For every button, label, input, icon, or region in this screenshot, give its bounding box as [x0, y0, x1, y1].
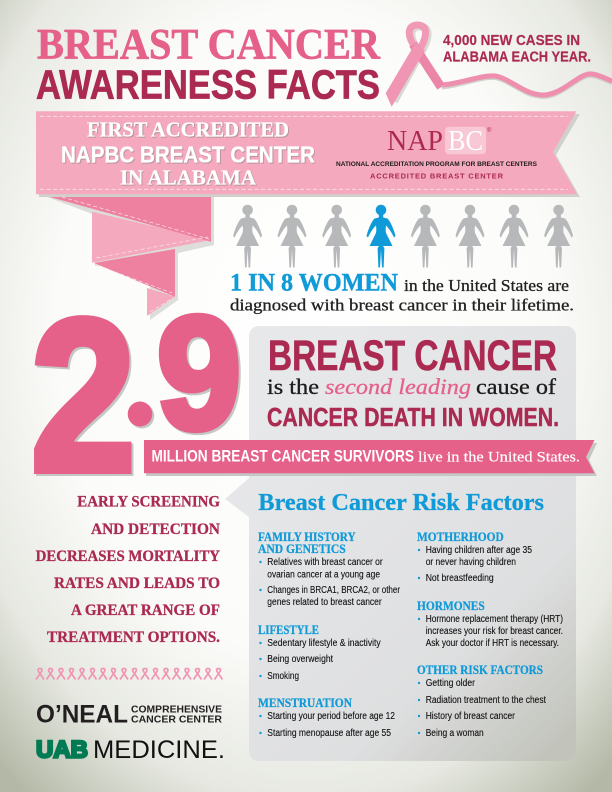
- risk group: family history: Changes in BRCA1, BRCA2, or other: [267, 585, 401, 596]
- logo: UAB Medicine: UAB: [36, 736, 88, 764]
- banner heading: IN ALABAMA: [120, 165, 257, 189]
- risk group: hormones: HORMONES: [417, 599, 485, 613]
- text block: early screening: TREATMENT OPTIONS.: [47, 629, 220, 646]
- 1 in 8 statement: 1 IN 8 WOMEN: [230, 270, 398, 297]
- second leading cause statement: is the: [267, 374, 319, 399]
- NAPBC logo: BC: [448, 125, 483, 157]
- 1 in 8 statement: [230, 270, 574, 315]
- 1 in 8 statement: in the United States are: [404, 276, 569, 295]
- heading: risk factors: Breast Cancer Risk Factors: [258, 490, 544, 516]
- icon row: small ribbons: [36, 668, 222, 680]
- risk group: family history: ovarian cancer at a young age: [267, 569, 380, 580]
- big number 2.9: [31, 275, 241, 516]
- risk group: hormones: [417, 599, 563, 649]
- NAPBC logo: NAP: [387, 125, 443, 157]
- logo: UAB Medicine: MEDICINE.: [93, 736, 225, 764]
- risk group: motherhood: Having children after age 35: [426, 545, 532, 556]
- text block: early screening: DECREASES MORTALITY: [36, 548, 220, 565]
- risk group: other risk factors: Getting older: [426, 678, 476, 689]
- logo: O'Neal: O’NEAL: [36, 701, 128, 729]
- banner: survivors: live in the United States.: [418, 450, 580, 466]
- text block: early screening: A GREAT RANGE OF: [71, 602, 220, 619]
- risk group: menstruation: Starting menopause after age 55: [267, 728, 391, 739]
- panel: grey information panel: [225, 326, 576, 761]
- 1 in 8 statement: diagnosed with breast cancer in their lifetime.: [230, 296, 574, 315]
- risk group: other risk factors: History of breast cancer: [426, 711, 516, 722]
- risk group: family history: genes related to breast cancer: [267, 597, 382, 608]
- risk group: family history: AND GENETICS: [258, 542, 346, 556]
- NAPBC logo: ACCREDITED BREAST CENTER: [370, 172, 504, 181]
- second leading cause statement: cause of: [476, 374, 557, 399]
- risk group: family history: Relatives with breast cancer or: [267, 557, 383, 568]
- banner: survivors: MILLION BREAST CANCER SURVIVORS: [152, 448, 414, 466]
- risk group: hormones: increases your risk for breast cancer.: [426, 626, 563, 637]
- panel: accreditation banner: [36, 111, 580, 197]
- risk group: motherhood: Not breastfeeding: [426, 573, 494, 584]
- risk group: menstruation: [258, 696, 395, 739]
- title: AWARENESS FACTS: [36, 62, 380, 108]
- risk group: other risk factors: OTHER RISK FACTORS: [417, 663, 543, 677]
- risk group: lifestyle: Smoking: [267, 671, 299, 682]
- NAPBC logo: NATIONAL ACCREDITATION PROGRAM FOR BREAST CENTERS: [336, 161, 537, 168]
- title: BREAST CANCER: [37, 22, 381, 68]
- risk group: family history: FAMILY HISTORY: [258, 530, 356, 544]
- ribbon fold: [39, 194, 214, 320]
- risk group: family history: [258, 530, 401, 608]
- risk group: motherhood: [417, 530, 532, 584]
- text block: early screening: AND DETECTION: [91, 521, 220, 538]
- risk group: menstruation: Starting your period before age 12: [267, 711, 395, 722]
- callout: new cases: [443, 33, 591, 66]
- title: [36, 22, 381, 108]
- callout: new cases: ALABAMA EACH YEAR.: [443, 50, 591, 66]
- banner heading: [61, 118, 315, 189]
- risk group: lifestyle: Sedentary lifestyle & inactivity: [267, 638, 381, 649]
- risk group: lifestyle: [258, 623, 381, 682]
- banner heading: FIRST ACCREDITED: [87, 118, 289, 142]
- second leading cause statement: [267, 333, 559, 432]
- callout: new cases: 4,000 NEW CASES IN: [443, 33, 580, 49]
- risk group: lifestyle: LIFESTYLE: [258, 623, 319, 637]
- risk group: lifestyle: Being overweight: [267, 654, 333, 665]
- banner: survivors: [144, 440, 597, 476]
- NAPBC logo: ®: [487, 127, 492, 134]
- risk group: hormones: Ask your doctor if HRT is necessary.: [426, 638, 559, 649]
- risk group: other risk factors: Being a woman: [426, 728, 484, 739]
- text block: early screening: RATES AND LEADS TO: [54, 575, 220, 592]
- icon row: 1 in 8 women: [233, 205, 573, 268]
- risk group: other risk factors: [417, 663, 546, 739]
- banner heading: NAPBC BREAST CENTER: [61, 142, 315, 168]
- risk group: motherhood: or never having children: [426, 557, 516, 568]
- logo: O'Neal: [36, 701, 222, 729]
- icon: pink ribbon: [386, 25, 612, 107]
- big number 2.9: 9: [157, 283, 241, 462]
- text block: early screening: [36, 494, 221, 646]
- logo: O'Neal: CANCER CENTER: [131, 714, 222, 726]
- risk group: motherhood: MOTHERHOOD: [417, 530, 504, 544]
- second leading cause statement: second leading: [325, 374, 471, 399]
- risk group: hormones: Hormone replacement therapy (HRT): [426, 614, 563, 625]
- big number 2.9: 2: [31, 275, 136, 516]
- logo: O'Neal: COMPREHENSIVE: [131, 704, 222, 716]
- risk group: menstruation: MENSTRUATION: [258, 696, 352, 710]
- logo: UAB Medicine: [36, 736, 225, 764]
- NAPBC logo: [336, 125, 537, 181]
- text block: early screening: EARLY SCREENING: [77, 494, 221, 511]
- risk group: other risk factors: Radiation treatment to the chest: [426, 695, 546, 706]
